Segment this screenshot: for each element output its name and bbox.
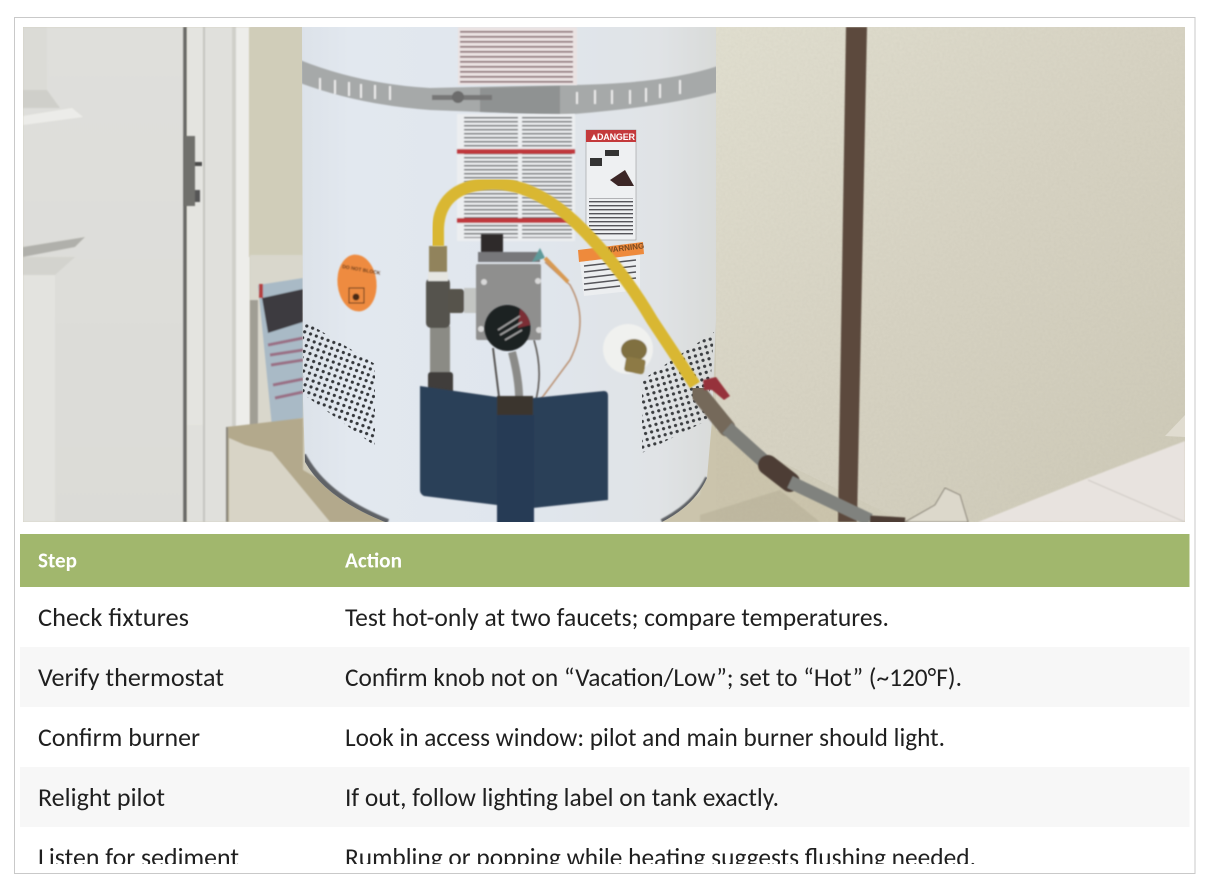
label: warning <box>578 241 645 296</box>
row: confirm burner: Confirm burner <box>38 721 200 753</box>
label: top instructions <box>458 27 577 85</box>
row: relight pilot: Relight pilot <box>38 781 165 813</box>
label: danger: DANGER <box>597 132 636 142</box>
photo: water heater in closet <box>23 27 1185 527</box>
row: listen for sediment: Listen for sediment <box>38 841 239 873</box>
red valve handle <box>703 377 730 400</box>
table header: Step <box>38 548 77 574</box>
row: verify thermostat: Verify thermostat <box>38 661 224 693</box>
row: listen for sediment: Rumbling or popping while heating suggests flushing needed. <box>345 841 976 873</box>
table header: Action <box>345 548 402 574</box>
metal strap <box>300 60 718 115</box>
iron gas pipe <box>426 246 477 394</box>
row: confirm burner: Look in access window: pilot and main burner should light. <box>345 721 945 753</box>
drain valve and plug <box>603 324 653 375</box>
tank base rim <box>303 455 708 522</box>
row: listen for sediment <box>40 848 974 864</box>
orange sticker: DO NOT BLOCK <box>342 264 381 277</box>
right wall <box>716 27 1185 448</box>
gas control valve <box>476 234 545 340</box>
label: warning: WARNING <box>605 241 645 255</box>
blue burner shield <box>420 386 608 525</box>
tank body <box>300 27 720 527</box>
control wires and flex pipe <box>493 258 580 418</box>
door frame trim <box>187 27 250 522</box>
row: relight pilot: If out, follow lighting label on tank exactly. <box>345 781 779 813</box>
row: check fixtures <box>38 608 888 630</box>
floor tile <box>978 441 1185 522</box>
label: lighting instructions <box>457 114 575 241</box>
label: danger <box>586 130 636 240</box>
table <box>20 534 1190 887</box>
water supply pipe <box>697 391 905 522</box>
door hinge <box>184 136 202 206</box>
brown corner strip <box>838 27 867 522</box>
row: verify thermostat: Confirm knob not on “Vacation/Low”; set to “Hot” (~120°F). <box>345 661 962 693</box>
closet wall gap <box>249 27 303 427</box>
table header <box>20 534 1190 587</box>
row: verify thermostat <box>38 667 960 690</box>
orange sticker <box>335 253 381 313</box>
right vent perforations <box>642 332 714 453</box>
row: check fixtures: Test hot-only at two faucets; compare temperatures. <box>345 601 889 633</box>
row: relight pilot <box>40 788 778 810</box>
pamphlet behind tank <box>258 278 303 427</box>
row: confirm burner <box>38 728 944 750</box>
wall debris <box>905 488 968 522</box>
row: check fixtures: Check fixtures <box>38 601 189 633</box>
door panel <box>23 27 187 522</box>
concrete ledge <box>226 418 395 522</box>
yellow gas line <box>438 184 695 385</box>
floor right of tank <box>663 426 838 522</box>
thermostat knob <box>484 305 530 351</box>
left vent perforations <box>303 320 375 446</box>
